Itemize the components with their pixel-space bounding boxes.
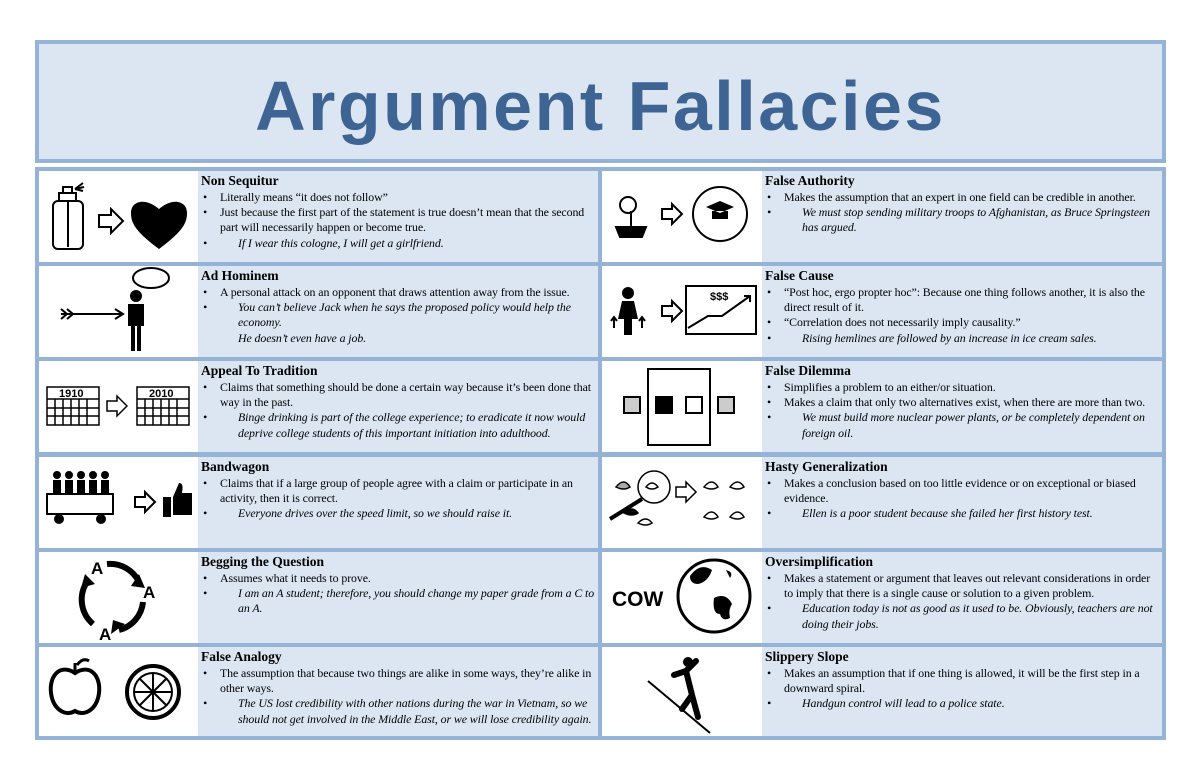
text: false cause: “Correlation does not necessarily imply causality.” — [784, 315, 1020, 329]
text: false analogy: The US lost credibility with other nations during the war in Vietnam, so we should not get involved in the Middle East, or we will lose credibility again. — [238, 696, 591, 726]
text: false dilemma: False Dilemma — [765, 363, 851, 378]
icon: woman to chart — [610, 285, 757, 335]
icon: squares — [623, 368, 735, 446]
panel: oversimplification — [602, 552, 1162, 643]
text: oversimplification: Education today is not as good as it used to be. Obviously, teachers are not doing their jobs. — [802, 601, 1153, 631]
text: bandwagon: Everyone drives over the speed limit, so we should raise it. — [238, 506, 512, 520]
text: non sequitur — [198, 171, 598, 262]
text: oversimplification — [762, 552, 1162, 643]
icon: apple and orange — [48, 658, 181, 720]
text: hasty generalization — [762, 457, 1162, 548]
text: ad hominem: Ad Hominem — [201, 268, 279, 283]
panel: false cause — [602, 266, 1162, 357]
text: false cause: “Post hoc, ergo propter hoc”: Because one thing follows another, it is also the direct result of it. — [784, 285, 1145, 314]
text: non sequitur: If I wear this cologne, I will get a girlfriend. — [238, 236, 444, 250]
text: ad hominem: He doesn’t even have a job. — [238, 331, 366, 345]
grid frame — [35, 167, 1166, 740]
text: ad hominem: A personal attack on an opponent that draws attention away from the issue. — [220, 285, 570, 299]
text: ad hominem: You can’t believe Jack when he says the proposed policy would help the economy. — [238, 300, 571, 329]
icon: calendars: 1910 — [59, 388, 83, 400]
text: false cause: Rising hemlines are followed by an increase in ice cream sales. — [802, 331, 1097, 345]
icon: cycle of A — [78, 559, 155, 643]
text: false analogy — [198, 647, 598, 736]
icon: wagon to thumbs up — [46, 471, 192, 524]
panel: non sequitur — [39, 171, 598, 262]
text: hasty generalization: Makes a conclusion based on too little evidence or on exceptional or biased evidence. — [784, 476, 1136, 505]
text: oversimplification: Makes a statement or argument that leaves out relevant considerations in order to imply that there is a single cause or solution to a given problem. — [784, 571, 1150, 600]
text: false dilemma: Makes a claim that only two alternatives exist, when there are more than two. — [784, 395, 1145, 409]
text: appeal to tradition: Claims that something should be done a certain way because it’s been done that way in the past. — [220, 380, 591, 409]
text: bandwagon: Bandwagon — [201, 459, 269, 474]
icon: cow and globe: COW — [612, 588, 664, 611]
text: false authority: We must stop sending military troops to Afghanistan, as Bruce Springsteen has argued. — [802, 205, 1150, 234]
text: hasty generalization: Hasty Generalization — [765, 459, 888, 474]
text: appeal to tradition: Binge drinking is part of the college experience; to eradicate it now would deprive college students of this important initiation into adulthood. — [238, 410, 585, 440]
text: bandwagon — [198, 457, 598, 548]
panel: bandwagon — [39, 457, 598, 548]
text: false authority: False Authority — [765, 173, 855, 188]
panel: ad hominem — [39, 266, 598, 357]
text: ad hominem — [198, 266, 598, 357]
icon: cycle of A: A — [91, 559, 103, 578]
text: false authority: Makes the assumption that an expert in one field can be credible in another. — [784, 190, 1136, 204]
text: slippery slope — [762, 647, 1162, 736]
text: begging the question: Begging the Question — [201, 554, 324, 569]
icon: cycle of A: A — [143, 583, 155, 602]
icon: grammy to graduate — [614, 186, 748, 242]
text: oversimplification: Oversimplification — [765, 554, 873, 569]
text: false analogy: False Analogy — [201, 649, 282, 664]
panel: false dilemma — [602, 361, 1162, 452]
text: begging the question: Assumes what it needs to prove. — [220, 571, 371, 585]
panel: begging the question — [39, 552, 598, 643]
panel: slippery slope — [602, 647, 1162, 736]
icon: calendars — [46, 386, 190, 426]
icon: arrow to person — [60, 267, 170, 351]
text: begging the question: I am an A student; therefore, you should change my paper grade from a C to an A. — [238, 586, 594, 615]
panel: appeal to tradition — [39, 361, 598, 452]
icon: calendars: 2010 — [149, 388, 173, 400]
icon: cologne to heart — [52, 182, 187, 250]
title: Argument Fallacies — [255, 67, 946, 145]
icon: woman to chart: $$$ — [710, 291, 728, 303]
panel: false authority — [602, 171, 1162, 262]
text: false dilemma — [762, 361, 1162, 452]
text: begging the question — [198, 552, 598, 643]
text: slippery slope: Handgun control will lead to a police state. — [802, 696, 1005, 710]
text: false dilemma: We must build more nuclear power plants, or be completely dependent on foreign oil. — [802, 410, 1145, 440]
text: false cause: False Cause — [765, 268, 834, 283]
text: false analogy: The assumption that because two things are alike in some ways, they’re alike in other ways. — [220, 666, 591, 695]
text: false cause — [762, 266, 1162, 357]
text: non sequitur: Literally means “it does not follow” — [220, 190, 388, 204]
text: bandwagon: Claims that if a large group of people agree with a claim or participate in an activity, then it is correct. — [220, 476, 573, 505]
text: non sequitur: Just because the first part of the statement is true doesn’t mean that the second part will necessarily happen or become true. — [220, 205, 584, 234]
text: false authority — [762, 171, 1162, 262]
icon: cow and globe — [612, 558, 752, 634]
panel: false analogy — [39, 647, 598, 736]
text: slippery slope: Makes an assumption that if one thing is allowed, it will be the first step in a downward spiral. — [784, 666, 1140, 695]
panel: hasty generalization — [602, 457, 1162, 548]
text: appeal to tradition: Appeal To Tradition — [201, 363, 318, 378]
text: slippery slope: Slippery Slope — [765, 649, 849, 664]
text: appeal to tradition — [198, 361, 598, 452]
text: false dilemma: Simplifies a problem to an either/or situation. — [784, 380, 996, 394]
title box — [35, 40, 1166, 163]
icon: magnifier and ducks — [609, 470, 745, 526]
text: non sequitur: Non Sequitur — [201, 173, 279, 188]
icon: person on slope — [647, 657, 711, 734]
text: hasty generalization: Ellen is a poor student because she failed her first history test. — [802, 506, 1093, 520]
